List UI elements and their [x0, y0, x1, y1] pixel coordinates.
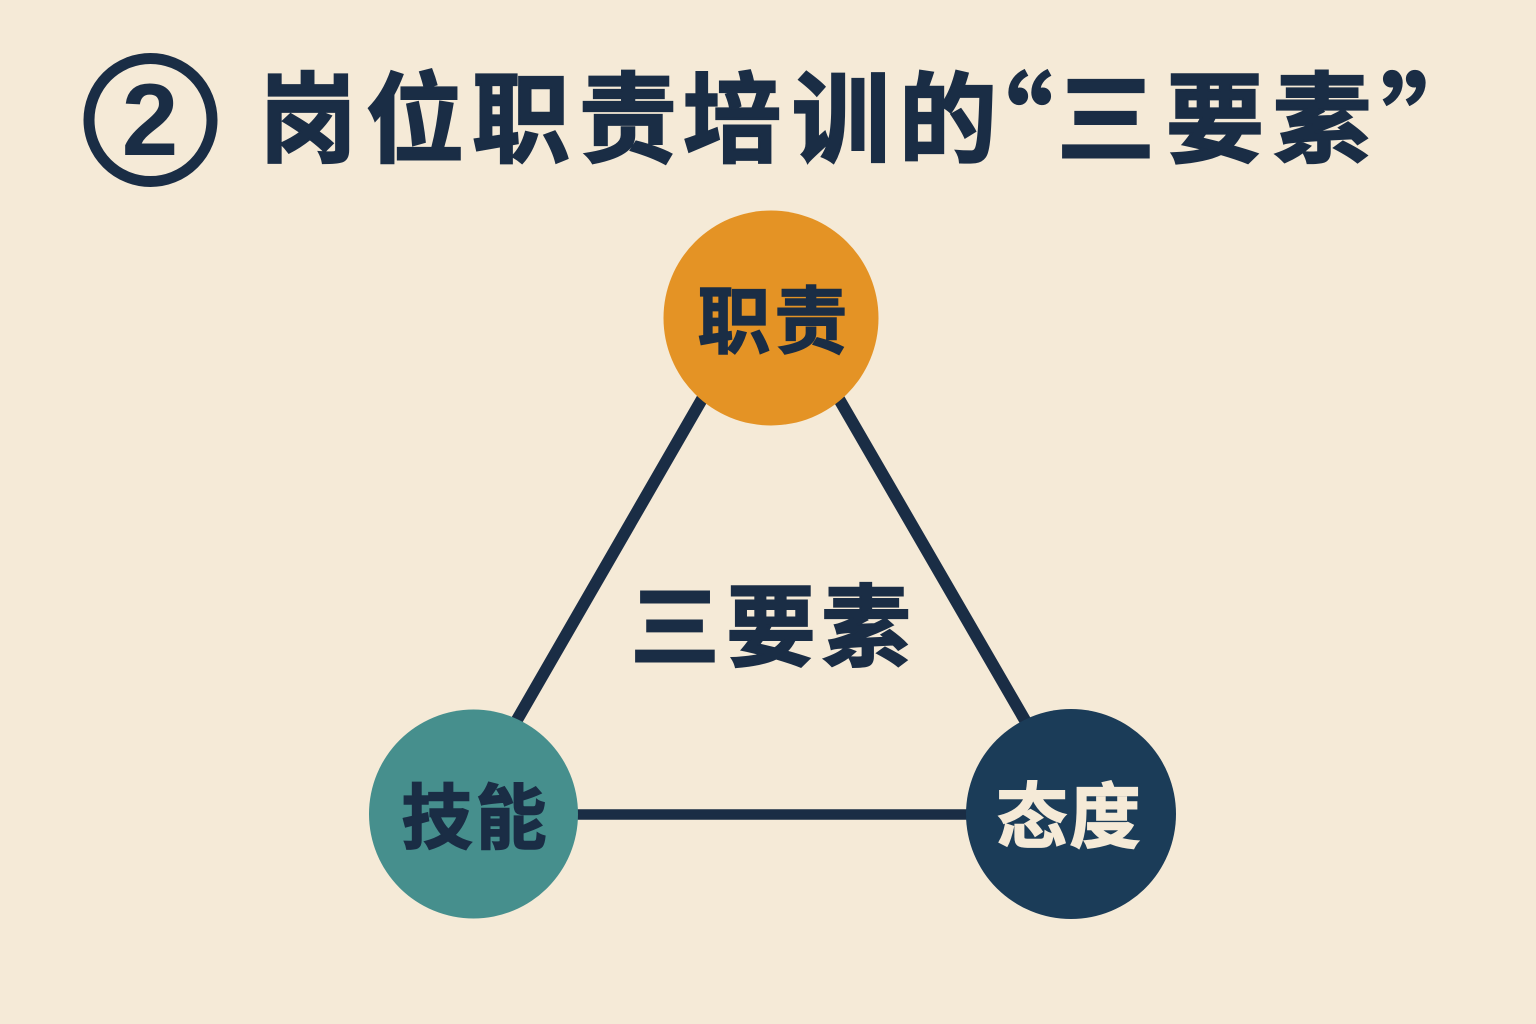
node: 职责: 职责: [698, 263, 848, 369]
title: 三要素: [1057, 41, 1371, 183]
title: ”: [1380, 36, 1494, 200]
title: [259, 36, 1494, 200]
title number badge: 2: [122, 63, 178, 177]
title number badge: [89, 58, 212, 182]
triangle connecting lines: [473, 361, 1071, 814]
node: 职责: [664, 210, 878, 426]
node: 态度: [966, 709, 1176, 919]
title: “: [940, 36, 1054, 200]
node: 技能: [369, 710, 578, 918]
node: 态度: 态度: [996, 761, 1141, 863]
center label: 三要素: [630, 556, 910, 685]
node: 技能: 技能: [401, 762, 547, 864]
title: 岗位职责培训的: [259, 41, 997, 183]
